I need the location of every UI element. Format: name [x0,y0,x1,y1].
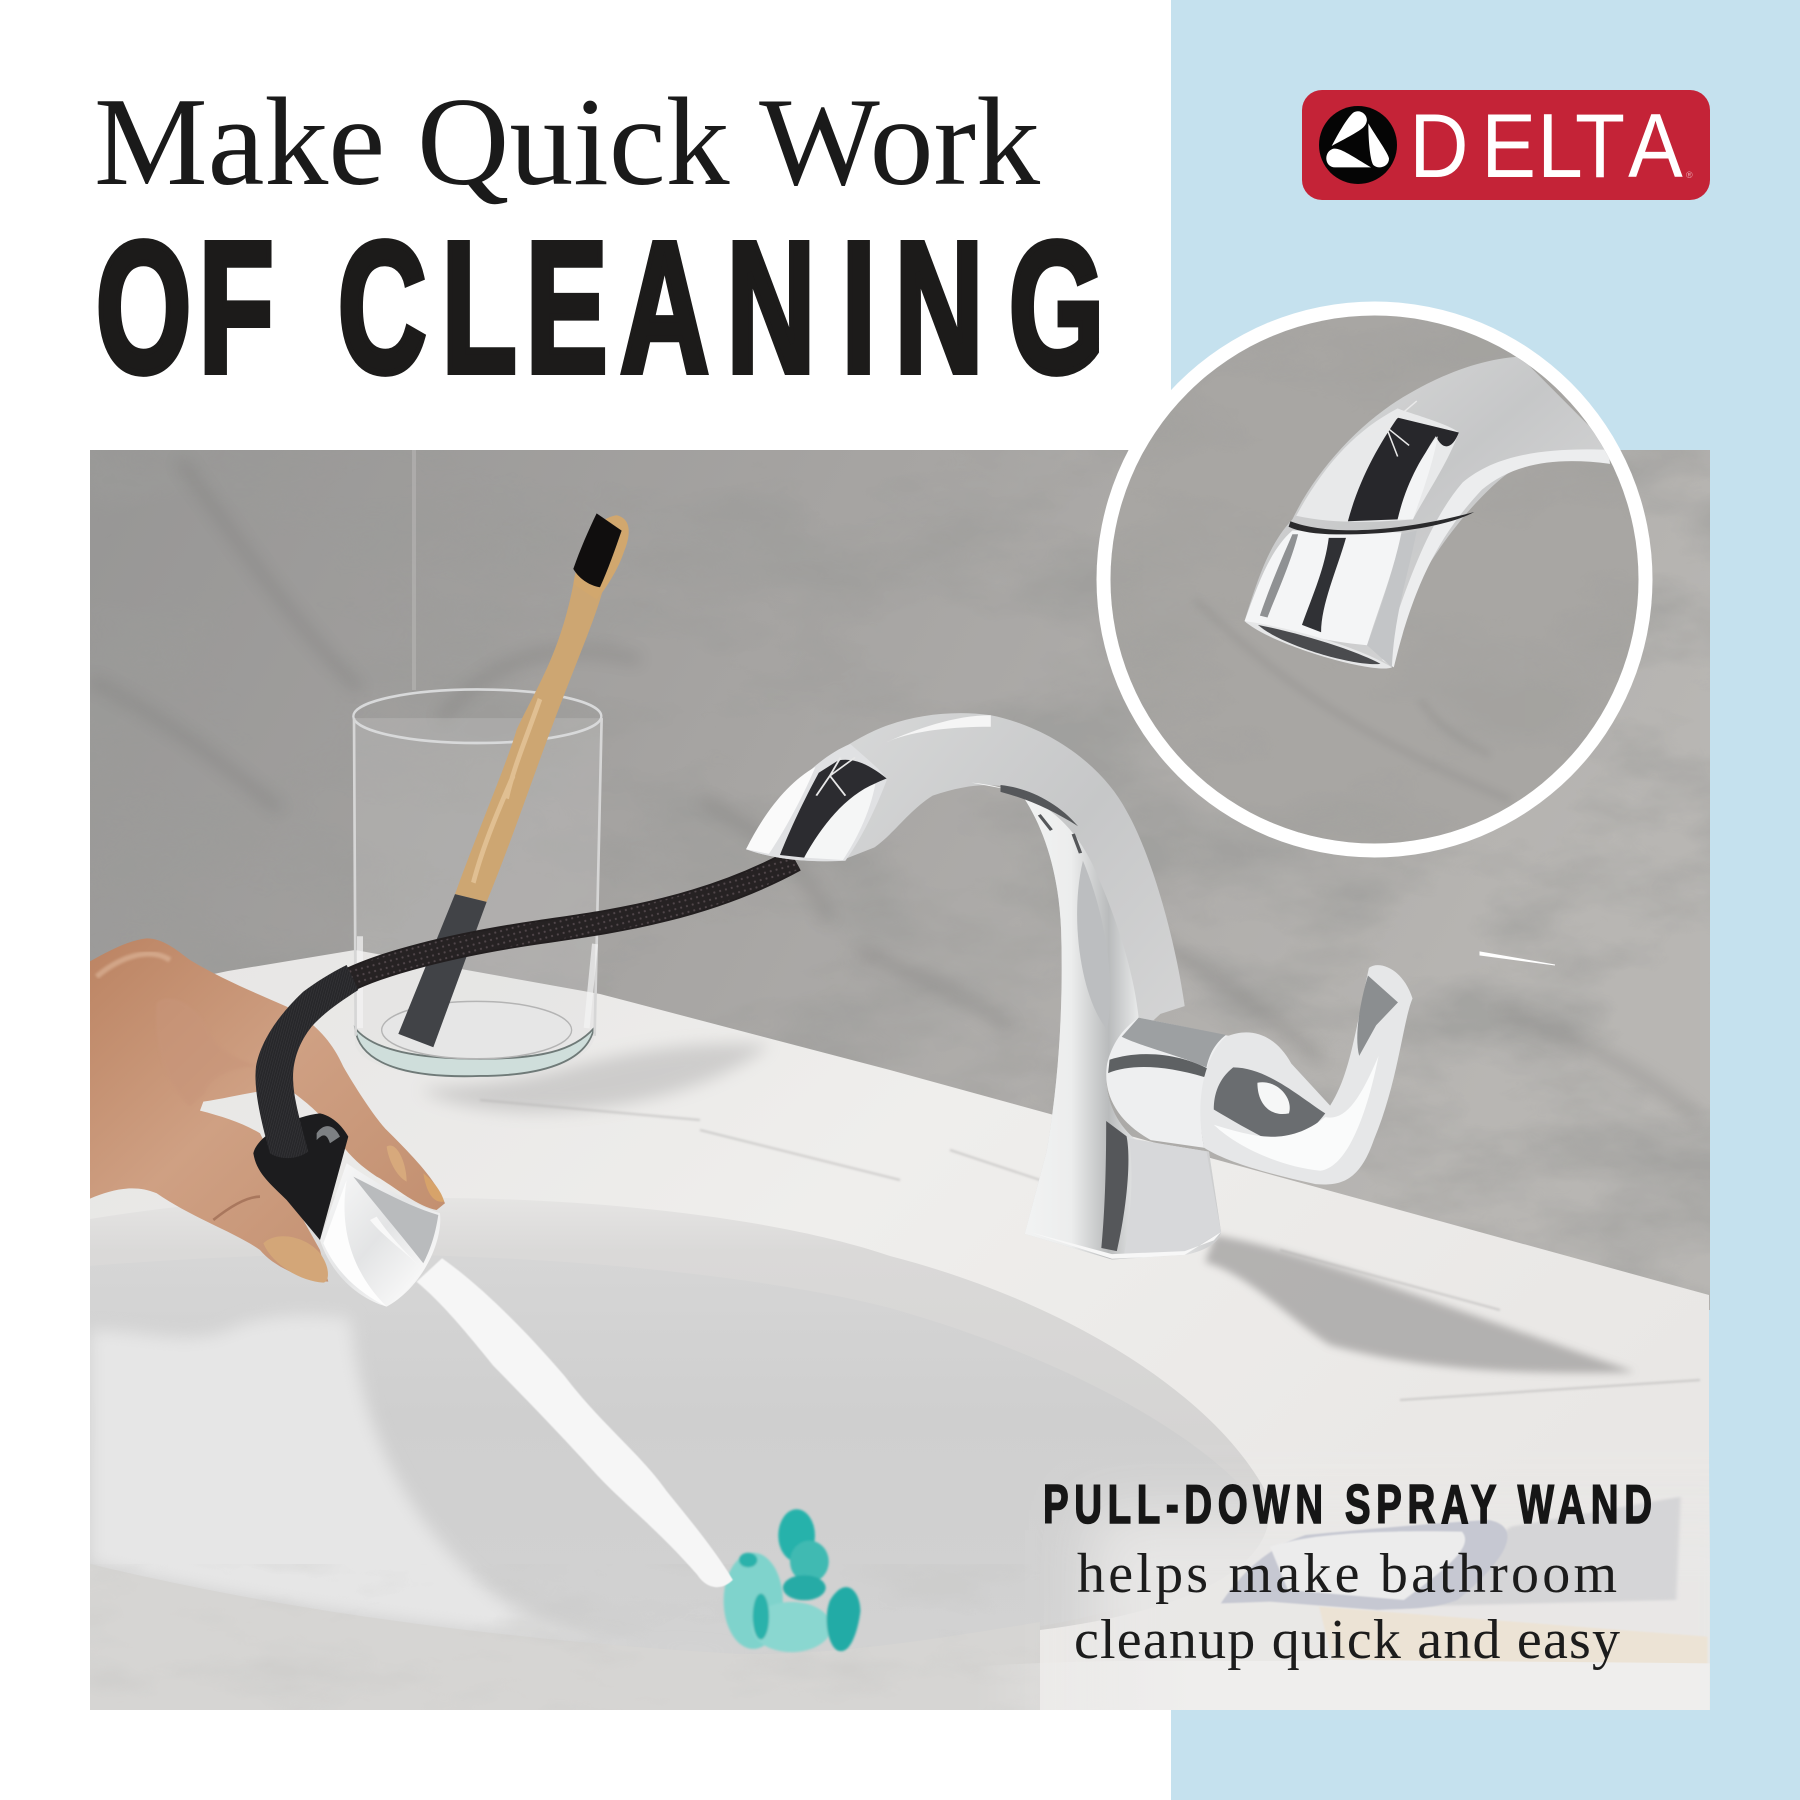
title line 1: Make Quick Work [94,73,1040,212]
caption heading: PULL-DOWN SPRAY WAND [1043,1474,1652,1536]
braided hose lower bend [255,965,358,1158]
caption line 2: cleanup quick and easy [1074,1609,1620,1671]
caption line 1: helps make bathroom [1077,1543,1617,1605]
aerator [1245,621,1392,669]
marble countertop [90,950,1709,1710]
toothbrush [398,513,629,1047]
Delta logo: ® [1686,170,1693,180]
black connector [253,1113,348,1240]
Delta logo: DELTA [1409,96,1683,197]
inset circle: spout close-up [1096,302,1652,858]
blue background panel [1171,0,1800,1800]
faucet shadow [1205,1235,1635,1373]
caption backdrop haze [1076,1492,1710,1710]
bowl pale basin area [90,1314,566,1636]
title [94,73,1104,412]
wand tip on spout [746,744,887,861]
ledge marble [300,1564,552,1635]
Delta logo [1302,90,1710,200]
caption [1043,1474,1652,1671]
hand [87,938,445,1283]
spout hose seam [1289,512,1474,534]
faucet spout and body [747,713,1210,1158]
finger nails [387,1145,407,1182]
braided hose upper run [345,860,795,982]
sparkle [1363,401,1417,456]
sparkle [816,757,855,796]
water stream [417,1258,733,1587]
glass tumbler [353,513,629,1076]
inset marble texture [1110,315,1640,845]
marble wall [90,450,1710,1310]
faucet lever [1200,965,1413,1185]
stem highlight [971,783,1221,1260]
sink front ledge [90,1610,1040,1710]
title line 2: OF CLEANING [96,204,1104,412]
sink rim [90,1196,1269,1660]
faucet handle hub [1106,1018,1233,1148]
toothpaste and towel behind caption [975,1497,1710,1713]
teal toothpaste [724,1509,860,1652]
photo panel: bathroom sink scene [87,450,1770,1770]
thumb nail [263,1236,328,1283]
main faucet [746,713,1413,1260]
inset spout [1245,357,1616,669]
spray wand head [253,965,440,1307]
sink bowl [90,1318,608,1643]
